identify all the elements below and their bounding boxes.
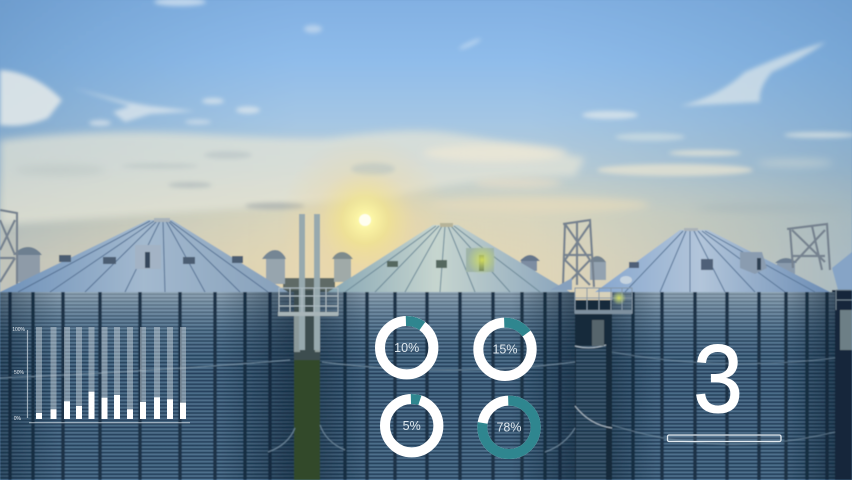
silo: right [550, 228, 835, 480]
y axis labels: 50% [14, 370, 25, 376]
donut: 5%: 5% [403, 419, 421, 433]
silo: left [0, 218, 295, 480]
lens flare [612, 291, 626, 305]
y axis labels: 0% [14, 416, 22, 422]
donut: 15%: 15% [492, 343, 518, 357]
bar values [36, 392, 186, 419]
donut: 78%: 78% [496, 421, 522, 435]
donut: 10% [380, 321, 433, 374]
far right silo [832, 252, 852, 350]
left silo wall [0, 292, 295, 480]
vent cylinders [13, 247, 797, 284]
lattice towers [0, 210, 830, 287]
twin stacks [299, 214, 320, 350]
bar chart [12, 327, 190, 423]
center silo wall [320, 292, 575, 480]
railing platforms [278, 288, 852, 316]
y axis labels [12, 327, 26, 422]
right silo roof [595, 228, 830, 292]
sun [280, 135, 450, 305]
recessed silo section [550, 278, 612, 480]
treeline [283, 278, 335, 292]
left silo roof [0, 218, 288, 292]
donut: 10%: 10% [394, 341, 419, 355]
axes [28, 330, 190, 423]
progress bar [668, 435, 781, 442]
clouds [0, 0, 852, 225]
right silo wall [612, 292, 835, 480]
donut: 78% [482, 401, 536, 454]
big number 3: 3 [693, 325, 743, 433]
gap between silos [285, 290, 852, 480]
silo: center [320, 223, 575, 480]
donut: 5% [385, 399, 438, 452]
bar tracks [36, 327, 186, 419]
center silo roof [328, 223, 570, 292]
sky [0, 0, 852, 300]
donut: 15% [478, 323, 532, 376]
y axis labels: 100% [12, 327, 26, 333]
